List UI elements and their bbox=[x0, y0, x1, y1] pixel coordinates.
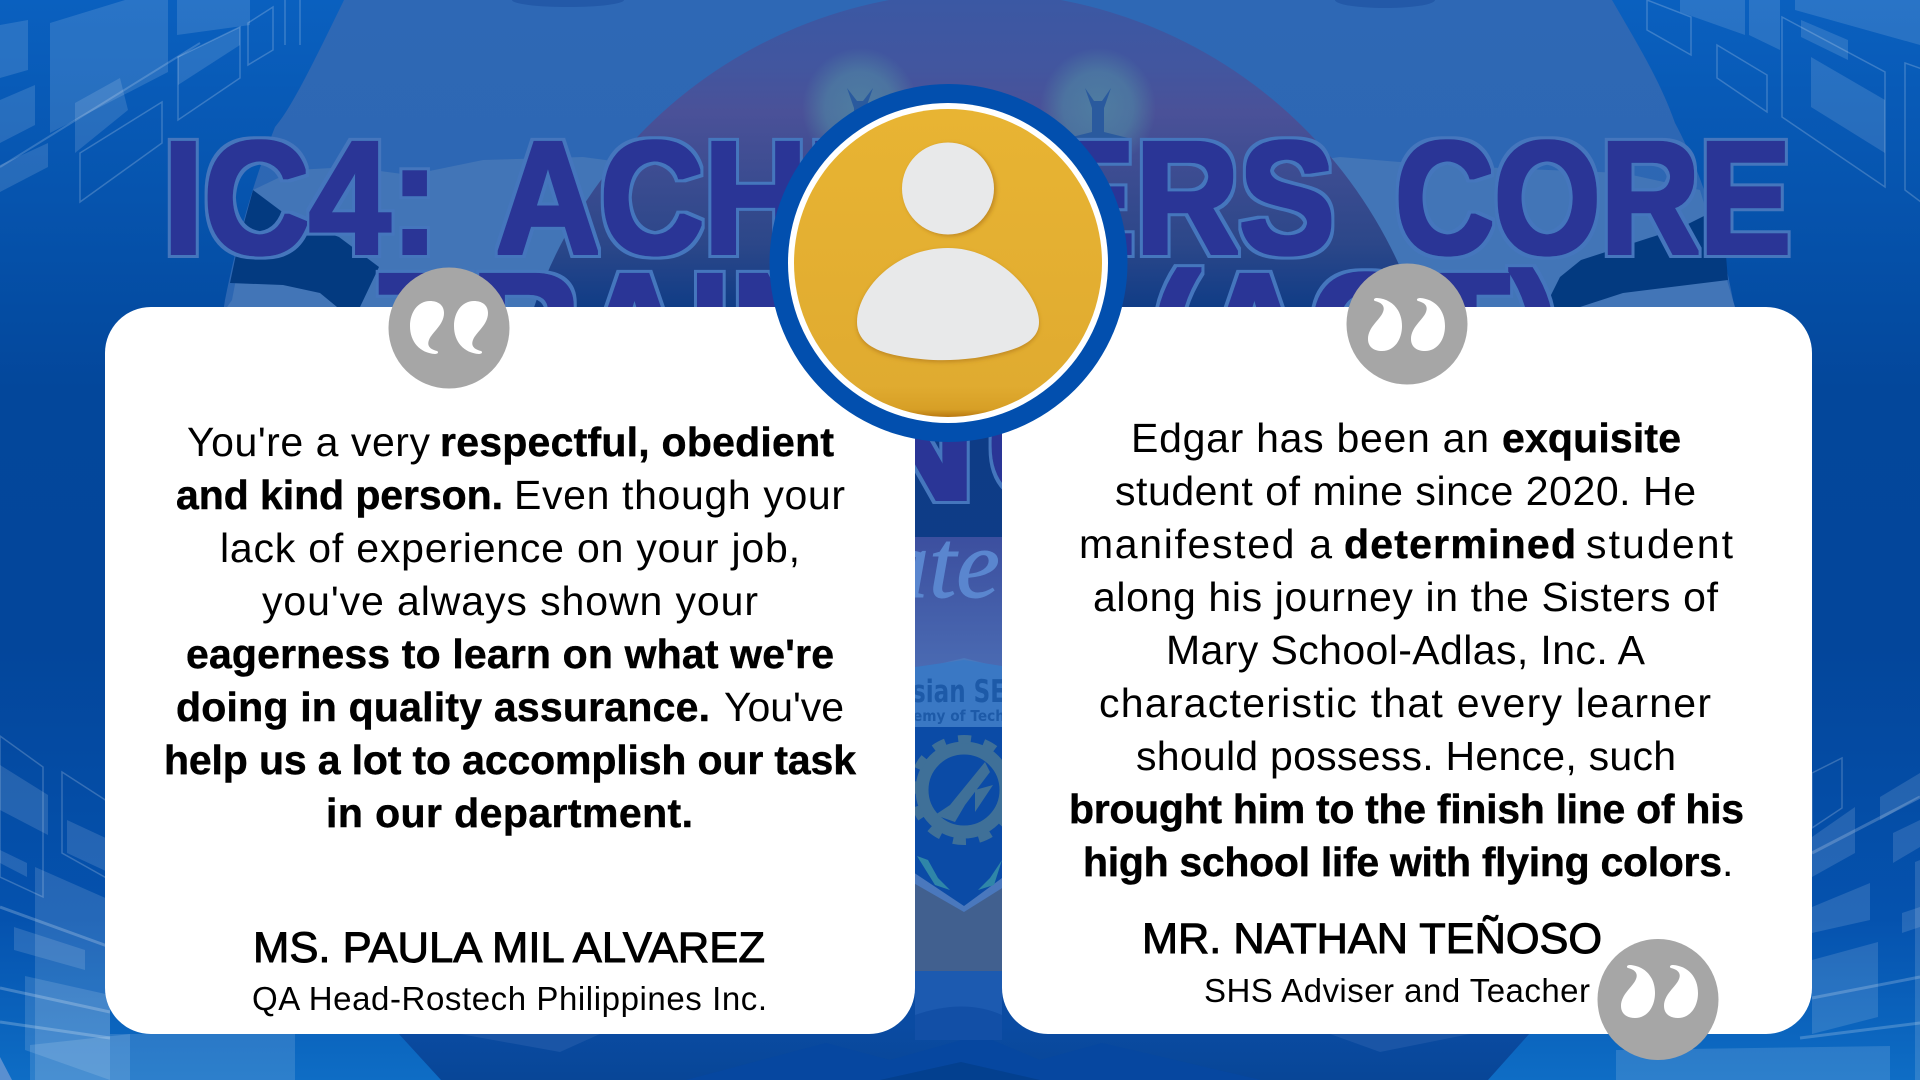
testimonial text: respectful, obedient bbox=[440, 419, 834, 465]
decoration: top-left tech panels bbox=[0, 0, 300, 202]
testimonial text: You've bbox=[724, 684, 844, 730]
testimonial text: student of mine since 2020. He bbox=[1115, 468, 1696, 514]
poster background: bottom mountains bbox=[460, 1034, 1470, 1080]
gear emblem bbox=[913, 739, 1015, 841]
yellow disc bbox=[794, 109, 1102, 417]
card background bbox=[1002, 307, 1812, 1034]
testimonial text: manifested a bbox=[1079, 521, 1332, 567]
shield top banner bbox=[915, 660, 1002, 727]
testimonial text: high school life with flying colors bbox=[1083, 839, 1722, 885]
poster: glow and figure right bbox=[1040, 48, 1156, 168]
poster background: light mountain band bbox=[225, 157, 1735, 310]
background title: first line: ACHIEVERS bbox=[496, 108, 1335, 287]
academy name: sian SE bbox=[912, 674, 1006, 710]
testimonial text: lack of experience on your job, bbox=[220, 525, 800, 571]
testimonial text: help us a lot to accomplish our task bbox=[164, 737, 856, 783]
person name: MS. PAULA MIL ALVAREZ bbox=[253, 924, 765, 972]
bottom wave bbox=[915, 1006, 1002, 1040]
panel: right testimonial card bbox=[1002, 307, 1812, 1034]
poster background: purple disc bbox=[509, 0, 1441, 924]
icon: right quote badge bbox=[1346, 264, 1468, 384]
icon: central avatar badge bbox=[770, 84, 1128, 442]
shield border bbox=[915, 658, 1002, 912]
poster centre column visible between cards bbox=[915, 537, 1002, 1040]
testimonial text bbox=[164, 419, 856, 836]
grey band bbox=[915, 880, 1002, 971]
testimonial text: along his journey in the Sisters of bbox=[1093, 574, 1719, 620]
testimonial text: doing in quality assurance. bbox=[176, 684, 710, 730]
testimonial text: in our department. bbox=[326, 790, 693, 836]
testimonial text: exquisite bbox=[1502, 415, 1681, 461]
person role: QA Head-Rostech Philippines Inc. bbox=[252, 980, 767, 1017]
background title: first line: IC4: bbox=[163, 108, 439, 287]
background title: second line: TRAINING (ACT) bbox=[379, 240, 1560, 419]
testimonial text: should possess. Hence, such bbox=[1136, 733, 1676, 779]
testimonial text bbox=[1069, 415, 1744, 885]
decoration: top-right tech panels bbox=[1647, 0, 1920, 205]
laurel bbox=[917, 856, 1002, 890]
person name: MR. NATHAN TEÑOSO bbox=[1142, 915, 1602, 963]
icon: left quote badge bbox=[388, 268, 510, 388]
testimonial text: . bbox=[1722, 839, 1733, 885]
shield bbox=[915, 727, 1002, 906]
lower blue band bbox=[915, 971, 1002, 1015]
testimonial text: student bbox=[1586, 521, 1734, 567]
poster background: large blue shape bbox=[216, 0, 1743, 1080]
testimonial text: and kind person. bbox=[176, 472, 503, 518]
testimonial text: you've always shown your bbox=[262, 578, 758, 624]
outer blue ring bbox=[770, 84, 1128, 442]
white ring bbox=[788, 103, 1108, 423]
poster background: top dark arcs bbox=[512, 0, 1435, 8]
band behind script word bbox=[915, 537, 1002, 667]
script word: ate bbox=[880, 511, 1000, 619]
card background bbox=[105, 307, 915, 1034]
academy subname: emy of Tech bbox=[913, 707, 1005, 725]
poster: glow and figure left bbox=[802, 48, 918, 168]
testimonial text: brought him to the finish line of his bbox=[1069, 786, 1744, 832]
testimonial text: Even though your bbox=[514, 472, 845, 518]
testimonial text: You're a very bbox=[187, 419, 430, 465]
avatar head bbox=[902, 142, 994, 234]
person role: SHS Adviser and Teacher bbox=[1204, 972, 1590, 1009]
decoration: bottom-left tech panels bbox=[0, 736, 295, 1080]
icon: bottom quote badge bbox=[1598, 939, 1718, 1060]
avatar shadows bbox=[857, 144, 1039, 362]
decoration: bottom-right tech panels bbox=[1616, 758, 1920, 1080]
testimonial text: eagerness to learn on what we're bbox=[186, 631, 834, 677]
testimonial text: characteristic that every learner bbox=[1099, 680, 1711, 726]
testimonial text: determined bbox=[1344, 521, 1576, 567]
testimonial text: Mary School-Adlas, Inc. A bbox=[1166, 627, 1646, 673]
background title: third line: NG bbox=[860, 354, 1111, 533]
panel: left testimonial card bbox=[105, 307, 915, 1034]
testimonial text: Edgar has been an bbox=[1131, 415, 1489, 461]
background title: first line: CORE bbox=[1395, 108, 1791, 287]
avatar body bbox=[857, 248, 1039, 360]
background title: first line bbox=[163, 108, 1791, 287]
